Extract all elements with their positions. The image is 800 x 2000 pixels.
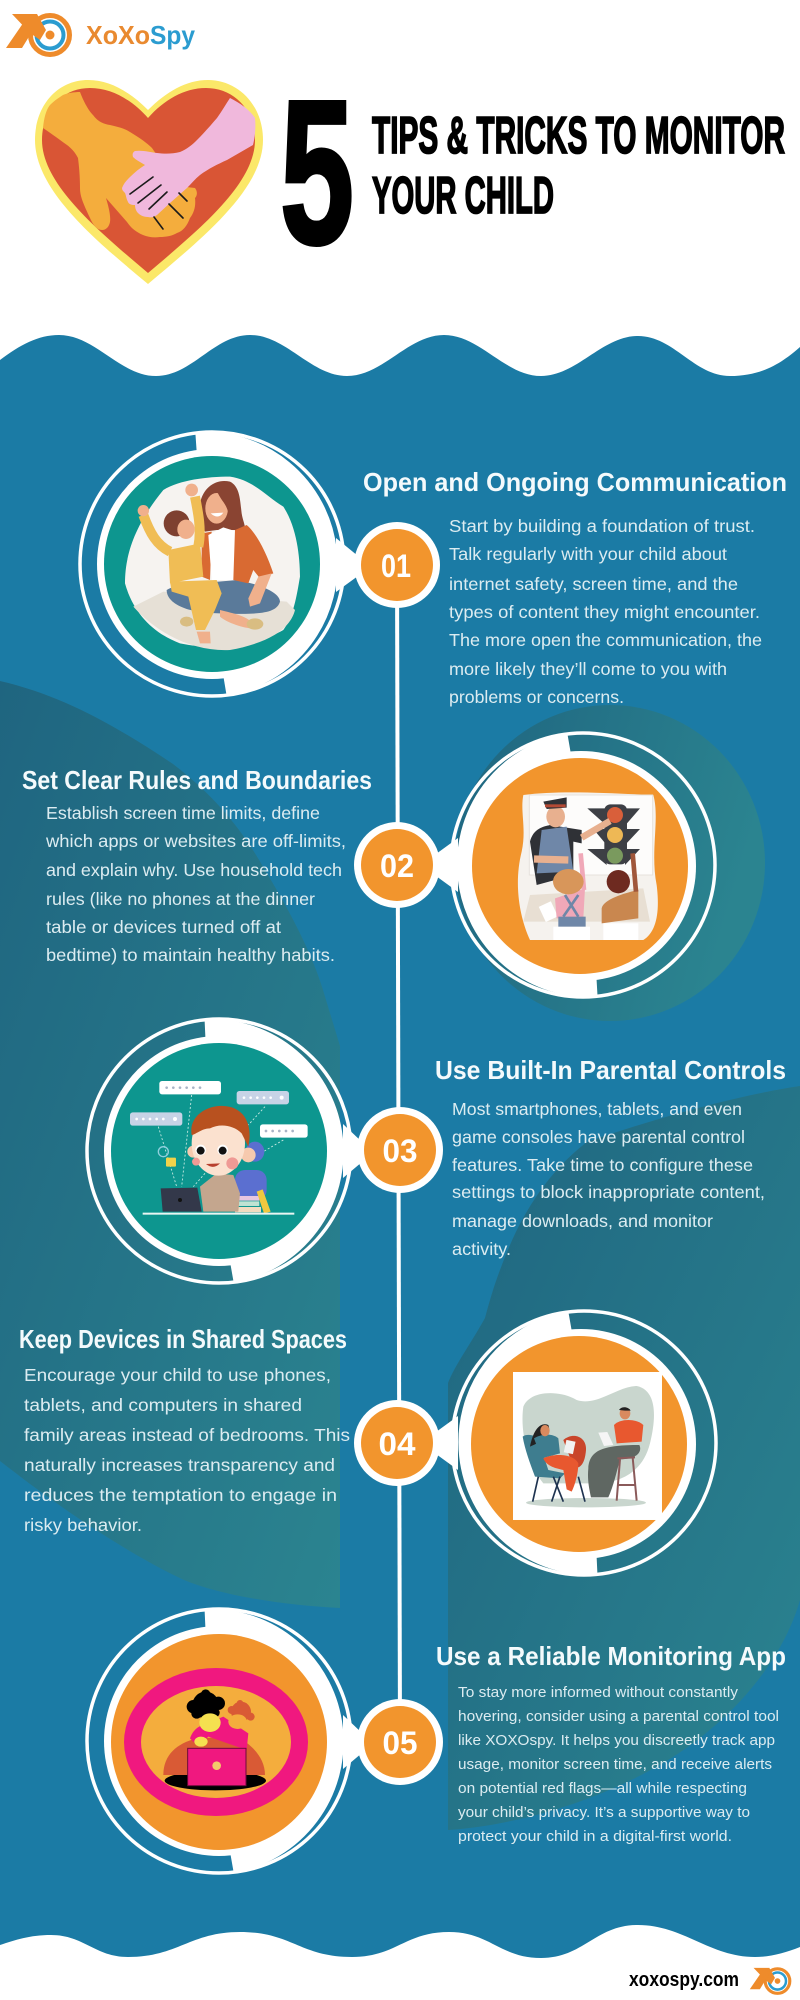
body text 5: hovering, consider using a parental control tool — [458, 1708, 779, 1725]
body text 3 — [452, 1099, 765, 1259]
circle frame 4 — [436, 1311, 716, 1575]
body text 2: which apps or websites are off-limits, — [45, 831, 346, 851]
body text 1: Talk regularly with your child about — [449, 544, 727, 564]
body text 5: like XOXOspy. It helps you discreetly track app — [458, 1732, 775, 1749]
logo mark — [6, 14, 70, 54]
illustration: mother and child — [125, 477, 300, 650]
body text 2: rules (like no phones at the dinner — [46, 889, 315, 909]
body text 2: and explain why. Use household tech — [46, 860, 342, 880]
body text 4: naturally increases transparency and — [24, 1455, 335, 1475]
icon: heart with holding hands — [35, 80, 263, 284]
body text 5: on potential red flags—all while respecting — [458, 1780, 747, 1797]
badge 04: 04 — [378, 1426, 416, 1462]
body text 3: activity. — [452, 1239, 511, 1259]
body text 4 — [24, 1365, 350, 1535]
body text 4: tablets, and computers in shared — [24, 1395, 302, 1415]
panel: tip 5 — [87, 1609, 786, 1873]
logo wordmark — [86, 20, 196, 50]
footer website: xoxospy.com — [629, 1969, 739, 1991]
body text 2: table or devices turned off at — [46, 917, 281, 937]
body text 3: settings to block inappropriate content, — [452, 1182, 765, 1202]
body text 3: game consoles have parental control — [452, 1127, 745, 1147]
body text 1 — [449, 516, 762, 707]
timeline line — [397, 565, 400, 1742]
badge 05 — [357, 1699, 443, 1785]
logo wordmark: Spy — [150, 20, 196, 50]
badge 02: 02 — [380, 848, 414, 884]
body text 5: usage, monitor screen time, and receive alerts — [458, 1756, 772, 1773]
title line 2: YOUR CHILD — [372, 167, 554, 225]
body text 1: problems or concerns. — [449, 687, 624, 707]
badge 04 — [354, 1400, 440, 1486]
badge 03: 03 — [382, 1133, 418, 1169]
illustration: two adults sitting with devices — [513, 1372, 662, 1520]
badge 05: 05 — [382, 1725, 418, 1761]
heading 3: Use Built-In Parental Controls — [435, 1055, 786, 1085]
body text 1: Start by building a foundation of trust. — [449, 516, 755, 536]
background blob: left — [0, 681, 340, 1608]
illustration: boy at laptop with passwords — [130, 1081, 308, 1215]
body text 1: The more open the communication, the — [449, 630, 762, 650]
logo wordmark: XoXo — [86, 20, 150, 50]
heading 2: Set Clear Rules and Boundaries — [22, 765, 372, 795]
body text 4: reduces the temptation to engage in — [24, 1485, 337, 1505]
body text 1: internet safety, screen time, and the — [449, 574, 738, 594]
body text 2: Establish screen time limits, define — [46, 803, 320, 823]
footer logo mark — [750, 1968, 790, 1993]
logo: XoXoSpy header — [6, 14, 196, 54]
panel: tip 1 — [80, 432, 787, 707]
body text 3: features. Take time to configure these — [452, 1155, 753, 1175]
body text 5 — [458, 1684, 779, 1845]
illustration: parent and child at pink laptop — [163, 1689, 266, 1790]
body text 5: protect your child in a digital-first world. — [458, 1828, 732, 1845]
body text 3: Most smartphones, tablets, and even — [452, 1099, 742, 1119]
body text 2 — [45, 803, 346, 965]
body text 1: types of content they might encounter. — [449, 602, 760, 622]
body text 4: Encourage your child to use phones, — [24, 1365, 331, 1385]
heading 4: Keep Devices in Shared Spaces — [19, 1324, 347, 1354]
title — [280, 58, 785, 287]
circle frame 2 — [436, 733, 715, 997]
background blob: lower right — [448, 1086, 800, 1830]
body text 5: To stay more informed without constantly — [458, 1684, 739, 1701]
panel: tip 2 — [22, 733, 715, 997]
background blob: behind tip 2 — [455, 705, 765, 1021]
body text 4: family areas instead of bedrooms. This — [24, 1425, 350, 1445]
body text 3: manage downloads, and monitor — [452, 1211, 713, 1231]
panel: tip 4 — [19, 1311, 716, 1575]
body text 4: risky behavior. — [24, 1515, 142, 1535]
heading 5: Use a Reliable Monitoring App — [436, 1641, 786, 1671]
body text 5: your child’s privacy. It’s a supportive way to — [458, 1804, 750, 1821]
badge 01: 01 — [381, 548, 411, 584]
title numeral 5: 5 — [280, 58, 354, 287]
badge 01 — [354, 522, 440, 608]
badge 03 — [357, 1107, 443, 1193]
badge 02 — [354, 822, 440, 908]
circle frame 1 — [80, 432, 358, 696]
body text 1: more likely they’ll come to you with — [449, 659, 727, 679]
heading 1: Open and Ongoing Communication — [363, 467, 787, 497]
circle frame 3 — [87, 1019, 362, 1283]
illustration: police officer teaching traffic lights — [518, 792, 658, 940]
circle frame 5 — [87, 1609, 362, 1873]
panel: tip 3 — [87, 1019, 786, 1283]
body text 2: bedtime) to maintain healthy habits. — [46, 945, 335, 965]
